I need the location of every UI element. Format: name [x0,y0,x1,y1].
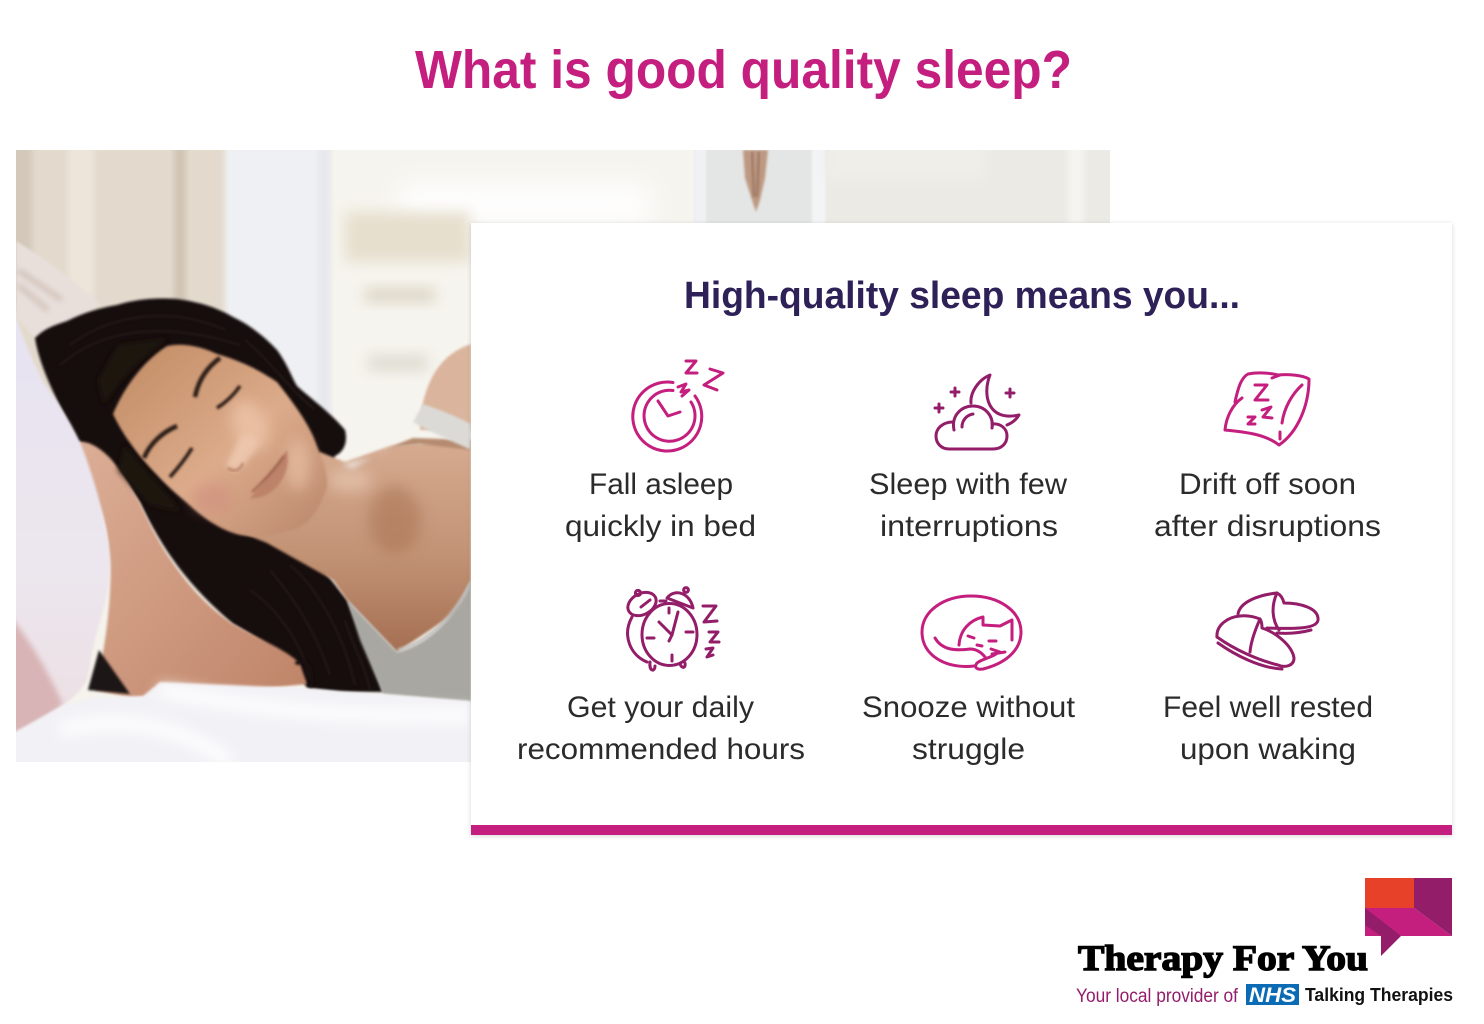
icon: moon and cloud [935,375,1019,449]
Talking Therapies: Talking Therapies [1305,985,1453,1005]
label: fall asleep: Fall asleep [589,468,733,501]
icon: slippers [1217,593,1318,669]
label: few interruptions: Sleep with few [869,468,1067,501]
arm [77,442,307,698]
closed eyes [217,386,240,408]
shadow under arm [88,650,130,694]
label: few interruptions: interruptions [880,510,1058,543]
label: snooze: struggle [912,733,1025,766]
upper pillow [16,241,100,338]
highlights on face [228,398,272,451]
tank top strap [390,438,471,450]
hair over forehead [100,342,174,508]
lips [250,450,288,499]
nose [226,434,258,470]
NHS badge: NHS [1249,984,1296,1007]
grey tank top [347,580,471,702]
chest and neck [235,440,471,652]
label: well rested: upon waking [1180,733,1356,766]
label: well rested: Feel well rested [1163,691,1373,724]
panel: high-quality sleep card [471,223,1452,835]
logo wordmark: Therapy For You [1078,938,1368,978]
icon: alarm clock [624,588,719,670]
icon: sleeping cat [922,596,1021,669]
white bed sheet [16,680,471,762]
card accent bar [471,825,1452,835]
label: daily hours: recommended hours [517,733,805,766]
face [113,345,327,536]
window background right [334,140,1116,460]
eyebrows [195,358,220,397]
shoulder [420,344,471,430]
icon: pillow with z's [1225,373,1309,445]
label: snooze: Snooze without [862,691,1076,724]
label: drift off: after disruptions [1154,510,1381,543]
hair [35,299,383,692]
logo tagline: Your local provider of [1076,986,1239,1007]
label: daily hours: Get your daily [567,691,754,724]
logo speech bubble [1365,878,1452,956]
label: drift off: Drift off soon [1179,468,1356,501]
label: fall asleep: quickly in bed [565,510,756,543]
pink shade at pillow base [16,620,64,732]
card heading: High-quality sleep means you... [684,275,1240,317]
front pillow [16,316,112,704]
hair strands [60,316,370,690]
logo: Therapy For You [1076,878,1453,1007]
title: What is good quality sleep? [415,40,1072,100]
wall and curtain left [16,150,330,412]
photo: woman sleeping in bed [10,140,1116,770]
icon: clock with z's [633,361,723,451]
curl over arm end [296,662,312,688]
